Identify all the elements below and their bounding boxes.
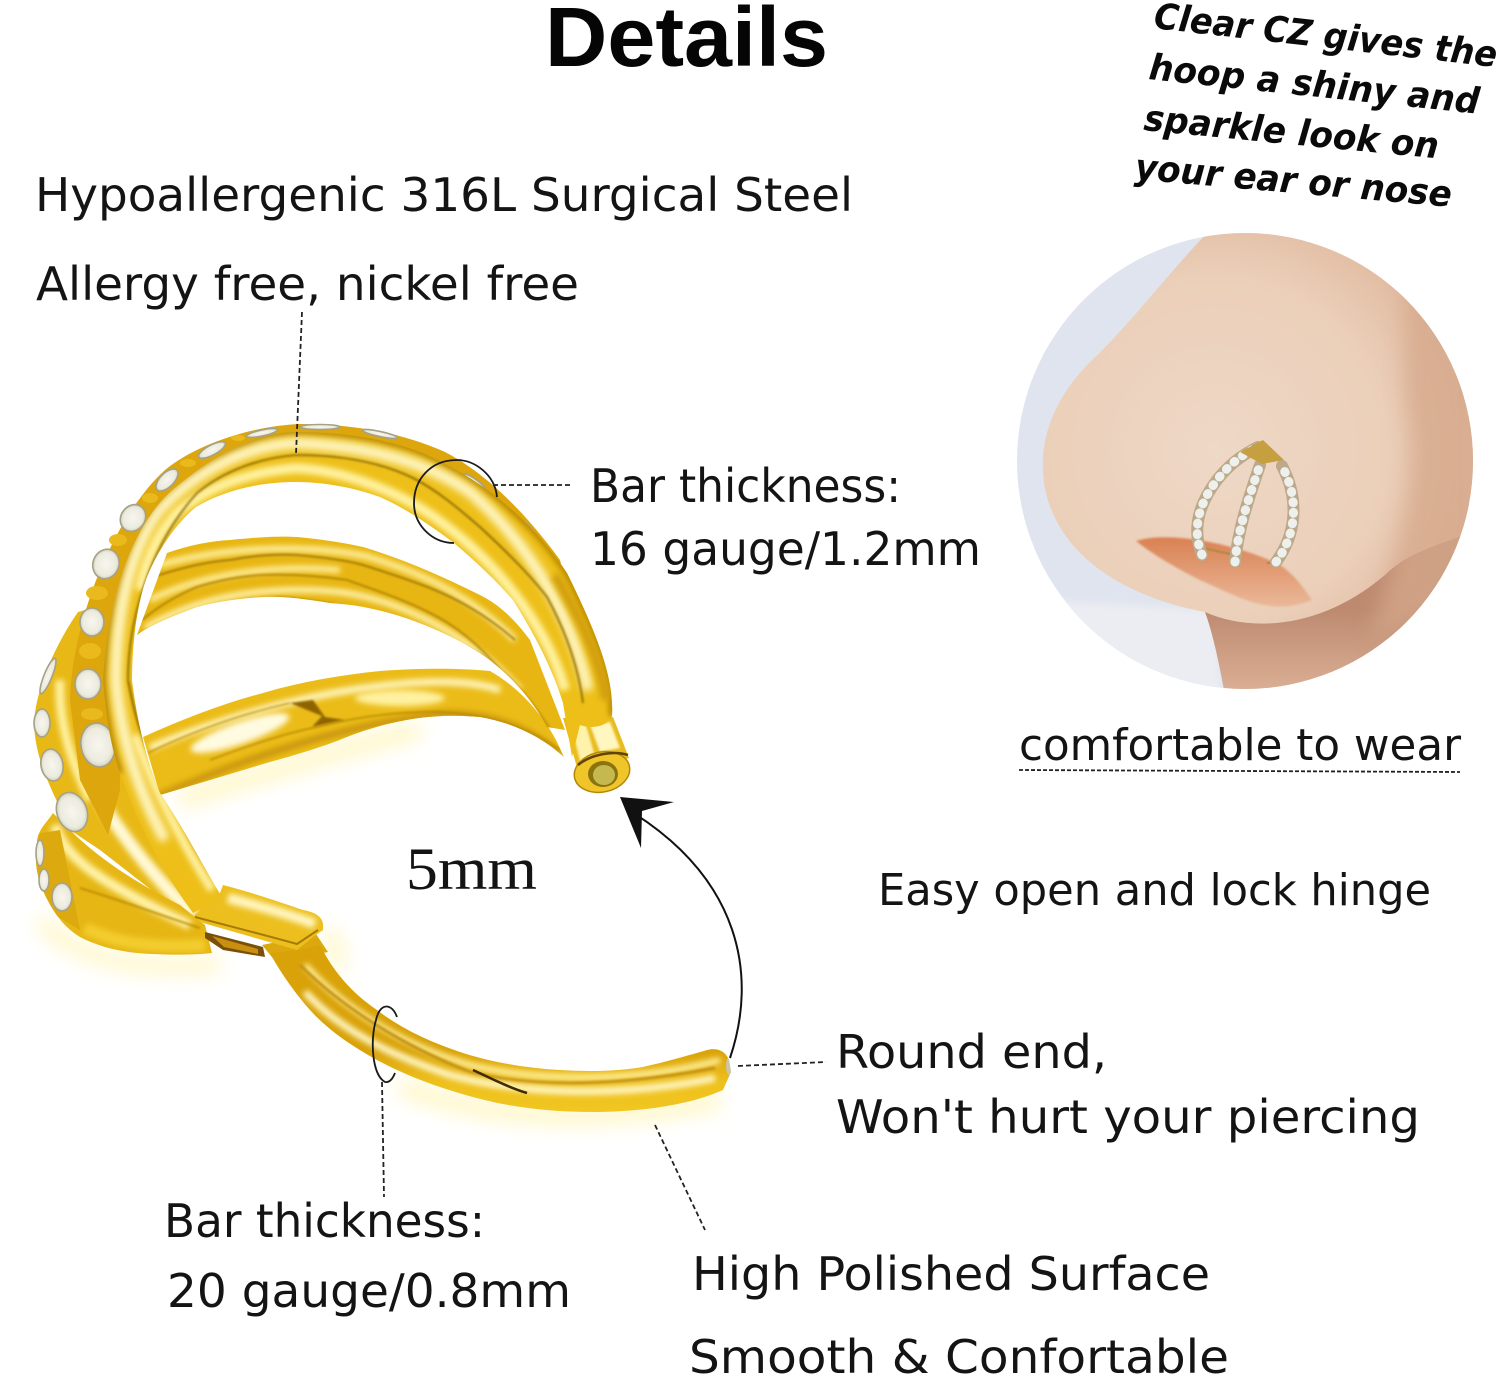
- band outer edge shade: [103, 432, 612, 773]
- tip rim dark: [578, 753, 628, 765]
- tip neck highlight: [590, 722, 620, 752]
- dimension label: 5mm: [406, 836, 537, 902]
- hinge cap: [193, 885, 323, 950]
- lobe highlight right: [355, 690, 445, 706]
- ring hinge: [1240, 440, 1284, 464]
- tip hole: [588, 761, 618, 787]
- bar lower bright: [305, 992, 715, 1091]
- lower middle strands: [143, 669, 564, 800]
- bar mid shade: [300, 965, 715, 1083]
- label: lower bar thickness: [164, 1194, 571, 1318]
- band shade bottom right: [555, 575, 606, 700]
- wedge shadow: [290, 700, 345, 727]
- hinge slot glow: [212, 936, 258, 954]
- upper strand highlight 1: [160, 549, 515, 640]
- gold ring product illustration: [30, 424, 732, 1116]
- upper strands base: [137, 537, 565, 730]
- left stone row: [1197, 450, 1252, 555]
- band highlight outer tube: [116, 443, 588, 840]
- lower strand bright stripe: [150, 682, 500, 748]
- divider line: [210, 712, 560, 760]
- label: polished surface: High Polished Surface: [692, 1247, 1210, 1301]
- hinge label: Easy open and lock hinge: [878, 865, 1431, 916]
- tip neck left highlight: [570, 722, 596, 768]
- upper strand highlight 3: [145, 590, 520, 690]
- left back strand: [34, 600, 220, 920]
- upper divider 1: [153, 555, 515, 640]
- nose photo: [1017, 233, 1473, 689]
- lower strands shading: [150, 714, 560, 800]
- ring on nose: [1197, 440, 1293, 563]
- hinge lip: [195, 917, 318, 944]
- label: round end: Round end,: [836, 1025, 1107, 1079]
- lobe stones base: [36, 830, 80, 930]
- bar top bright: [305, 965, 720, 1077]
- label: round end: [836, 1025, 1420, 1144]
- leader: top: [296, 312, 302, 454]
- annotation circle: lower bar: [373, 1006, 397, 1082]
- label: upper bar thickness: [590, 459, 981, 576]
- upper strand highlight 2: [150, 568, 340, 600]
- tip end: [570, 747, 634, 797]
- label: polished surface: [689, 1247, 1229, 1379]
- label: upper bar thickness: Bar thickness:: [590, 459, 901, 513]
- curved arrow: [620, 797, 742, 1058]
- bar dark glint: [473, 1070, 527, 1093]
- handwritten note: clear CZ: your ear or nose: [1133, 147, 1454, 216]
- leader: lower bar: [382, 1082, 384, 1197]
- middle stone row: [1235, 465, 1260, 562]
- middle row setting: [1235, 465, 1260, 562]
- photo backdrop: [1017, 233, 1473, 689]
- lower bar: [270, 945, 732, 1112]
- right row setting: [1276, 466, 1293, 562]
- leader: round end: [738, 1062, 826, 1066]
- left wide stripe highlight: [100, 800, 195, 915]
- nostril: [1136, 537, 1312, 607]
- allergy text: Allergy free, nickel free: [36, 257, 579, 311]
- material text: Hypoallergenic 316L Surgical Steel: [35, 168, 853, 222]
- divider line top: [148, 703, 290, 753]
- upper strand lower edge shade: [137, 598, 550, 730]
- upper middle strands: [137, 537, 565, 730]
- band dark divider: [128, 455, 583, 703]
- outer stone setting: [70, 424, 565, 835]
- band lower highlight: [135, 735, 212, 890]
- neck: [1205, 500, 1480, 700]
- band highlight inner tube: [140, 468, 565, 690]
- leader: upper bar: [493, 484, 570, 486]
- left back strand shine: [60, 680, 90, 800]
- cubic zirconia stones: [34, 424, 540, 911]
- label: lower bar thickness: 20 gauge/0.8mm: [167, 1264, 571, 1318]
- arrowhead: [620, 797, 674, 848]
- bar end cap: [726, 1058, 731, 1075]
- main front band: [103, 432, 612, 913]
- ring metal: [1204, 548, 1284, 563]
- stone prongs: [79, 435, 245, 720]
- lower strands base: [143, 669, 564, 795]
- right stone row: [1276, 466, 1293, 562]
- upper divider 2: [142, 575, 500, 670]
- lobe divider: [80, 888, 200, 928]
- caption: comfortable: comfortable to wear: [1019, 720, 1462, 771]
- nose skin: [1042, 233, 1473, 689]
- label: round end: Won't hurt your piercing: [836, 1090, 1420, 1144]
- lobe bottom band: [85, 928, 205, 946]
- handwritten note: clear CZ: sparkle look on: [1142, 98, 1441, 167]
- handwritten note: clear CZ: [1133, 0, 1499, 216]
- skin shading right: [1370, 260, 1480, 640]
- label: lower bar thickness: Bar thickness:: [164, 1194, 485, 1248]
- hinge highlight: [228, 898, 315, 924]
- leader: surface: [655, 1125, 705, 1230]
- white lower backdrop: [1068, 603, 1220, 687]
- label: upper bar thickness: 16 gauge/1.2mm: [590, 522, 981, 576]
- hinge slot: [205, 932, 265, 957]
- bottom lobe: [30, 813, 212, 955]
- annotation circle: upper bar: [414, 460, 497, 543]
- hinge neck: [262, 934, 328, 962]
- band dark divider lower: [126, 679, 206, 870]
- lobe top highlight: [55, 825, 190, 925]
- left row setting: [1197, 447, 1258, 555]
- handwritten note: clear CZ: hoop a shiny and: [1147, 47, 1483, 123]
- lobe highlight: [186, 709, 294, 758]
- tip hole centre: [593, 765, 615, 785]
- tip neck: [563, 717, 629, 778]
- face: [1043, 220, 1500, 624]
- ring glow: [40, 730, 720, 1116]
